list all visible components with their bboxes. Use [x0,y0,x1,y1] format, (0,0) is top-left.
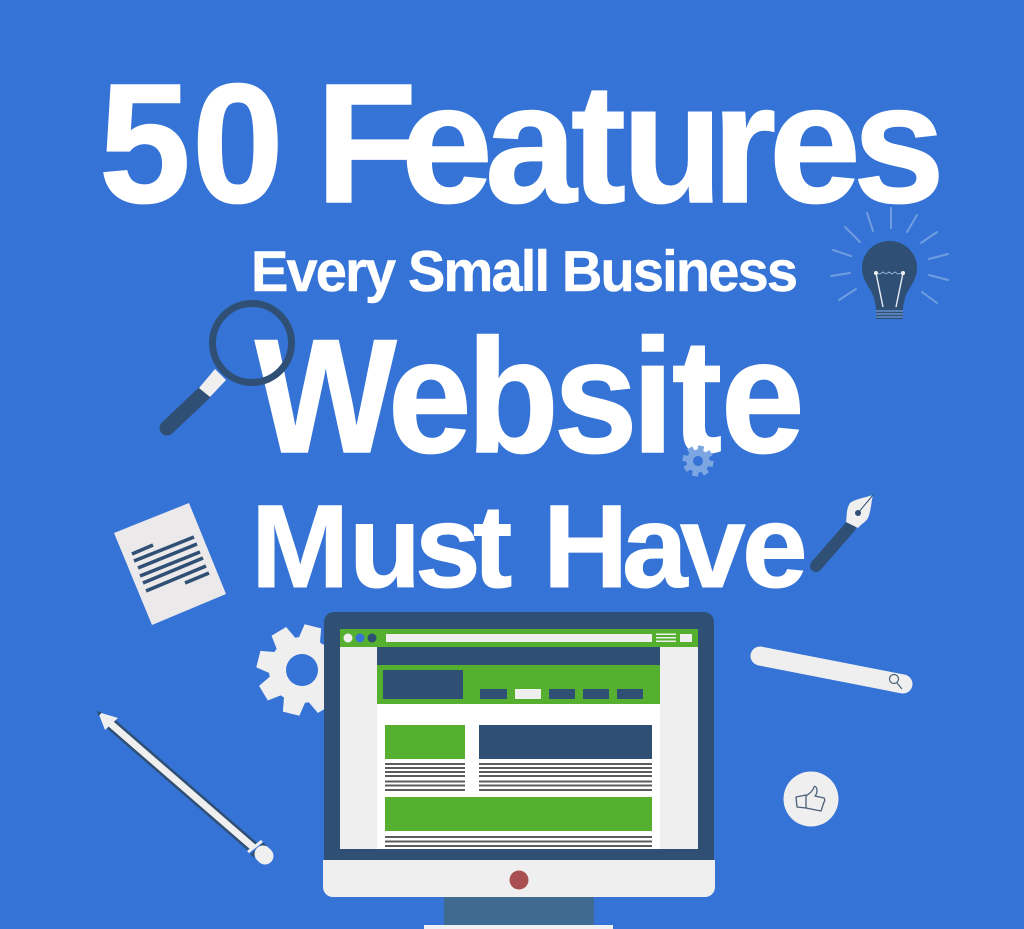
subtitle: Every Small Business: Every Small Business [251,240,798,304]
power button [510,870,528,890]
search bar [760,656,903,689]
monitor [323,612,715,929]
monitor chin [323,860,715,897]
title: 50 Features: 50 Features [99,49,945,239]
title: Website: Website [255,307,804,487]
icon: large gear [247,615,357,725]
icon: light bulb [831,208,948,319]
title: Must Have: Must Have [251,481,808,613]
screen [340,629,698,849]
browser bar [340,629,698,647]
icon: magnifying glass [167,304,292,428]
icon: small gear [680,443,716,479]
icon: fountain pen [816,495,873,566]
icon: document page [114,503,226,625]
web page [377,647,660,849]
monitor stand [444,896,594,925]
icon: thumbs up badge [784,772,838,826]
monitor bezel [324,612,714,860]
icon: pencil [97,711,265,856]
icon: search glass [890,674,902,689]
